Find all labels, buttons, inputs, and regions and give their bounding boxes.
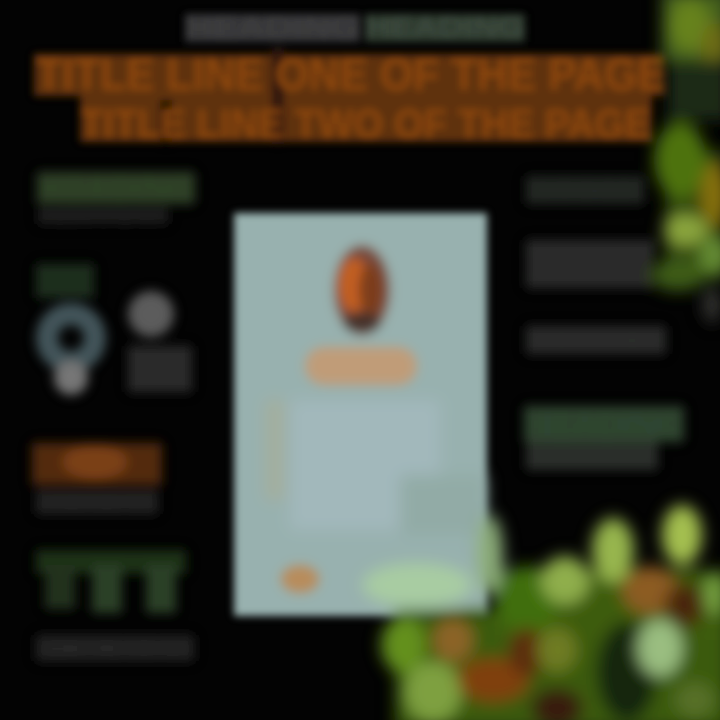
left column: orange heading	[32, 443, 162, 514]
left column: orange heading: supporting text	[36, 495, 156, 514]
kicker heading: HEADING	[365, 11, 525, 44]
right column text: text block	[526, 269, 631, 286]
right column text: text block	[526, 177, 645, 204]
right column text: text block	[526, 241, 655, 263]
icon: ring	[47, 314, 95, 395]
small green label	[36, 264, 94, 298]
left column: green heading	[37, 170, 195, 225]
title: TITLE LINE TWO OF THE PAGE	[80, 100, 650, 147]
small orange badge	[281, 565, 319, 593]
icon: stat	[128, 291, 192, 392]
left column: icons block	[36, 264, 192, 395]
foliage bottom right	[362, 505, 720, 720]
left column: green bars	[36, 550, 194, 661]
left column: green heading: HEADING	[37, 170, 195, 208]
right column text: text block	[526, 329, 667, 351]
left column: green heading: supporting text	[38, 209, 168, 225]
panel text lines	[266, 400, 485, 535]
small green label: LABEL	[36, 265, 94, 296]
center panel	[234, 213, 487, 616]
left column: green bars: supporting text here	[36, 638, 194, 658]
orange pill	[305, 347, 417, 385]
figure	[335, 246, 389, 334]
right column text	[526, 176, 667, 354]
right column: green heading: supporting text	[526, 449, 656, 469]
title	[34, 48, 666, 147]
right column: green heading	[524, 406, 684, 470]
kicker heading	[185, 11, 525, 44]
title: TITLE LINE ONE OF THE PAGE	[36, 48, 666, 100]
foliage highlights	[541, 505, 720, 718]
right column: green heading: HEADING	[524, 406, 684, 444]
foliage top right	[650, 0, 720, 323]
kicker heading: HEADING	[185, 11, 360, 44]
